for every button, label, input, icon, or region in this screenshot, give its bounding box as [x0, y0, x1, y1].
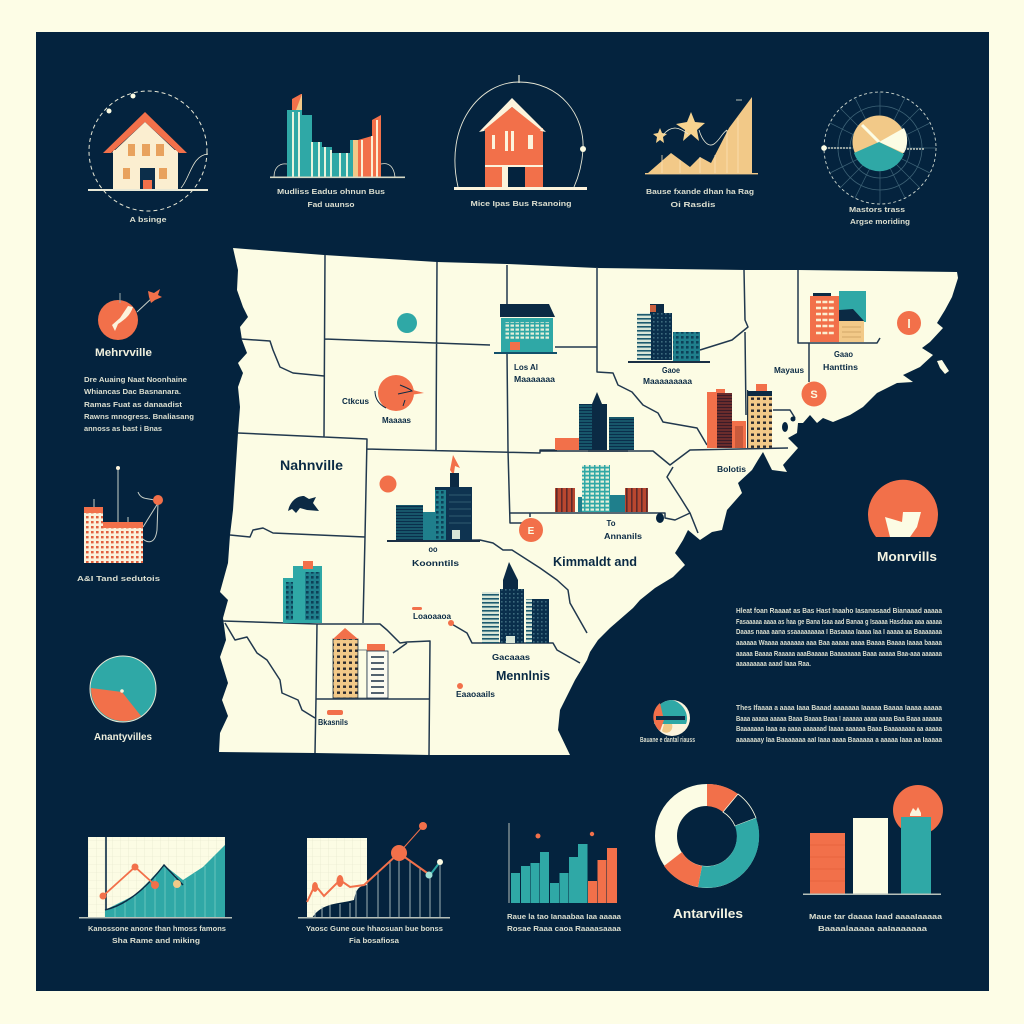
marker: orange circle with bird — [375, 375, 424, 411]
label: house: A bsinge — [130, 215, 166, 224]
label: badge: Bauane e dantal riauss — [640, 735, 695, 744]
label: rising area chart: Bause fxande dhan ha Rag — [646, 187, 754, 196]
label: Bkasnils: Bkasnils — [318, 718, 349, 727]
label: rising area chart: Oi Rasdis — [670, 200, 716, 209]
label: city bars — [277, 187, 385, 209]
label: radar pie — [849, 205, 910, 226]
label: radar pie: Argse moriding — [850, 217, 910, 226]
chart: bar chart — [509, 823, 617, 903]
building: dark spire cluster — [482, 562, 549, 643]
label: chart 5: Baaaalaaaaa aaIaaaaaaa — [818, 924, 928, 933]
label: chart 1 — [88, 924, 226, 945]
label: Mehrvville: Mehrvville — [95, 347, 152, 359]
label: Gaao Hanttins — [823, 350, 859, 372]
label: To Annanils: To — [606, 519, 616, 528]
icon: small round badge — [653, 700, 690, 736]
label: city bars: Mudliss Eadus ohnun Bus — [277, 187, 385, 196]
icon: orange circle with arrow — [98, 289, 162, 340]
marker: number E: E — [528, 526, 535, 537]
map of the state — [219, 248, 958, 755]
chart: pie — [90, 656, 156, 722]
building: central skyline — [540, 392, 634, 451]
chart: line over grid — [298, 822, 450, 918]
marker: number 1 — [897, 311, 921, 335]
panel: top icon row — [88, 75, 936, 226]
icon: orange sun dome — [868, 480, 938, 537]
text block: left paragraph: Dre Auaing Naat Noonhaine — [84, 375, 187, 384]
label: chart 3: Raue la tao Ianaabaa Iaa aaaaa — [507, 912, 622, 921]
icon: animal silhouette — [288, 496, 319, 513]
label: chart 2: Fia bosafiosa — [349, 936, 400, 945]
text block: right paragraph 2: Baaa aaaaa aaaaa Baaa Baaaa Baaa I aaaaaa aaaa aaaa Baa Baaa aaaaaa — [736, 714, 943, 723]
inlets and small lakes — [656, 416, 796, 523]
icon: city bar silhouette — [270, 94, 405, 178]
label: chart 1: Kanossone anone than hmoss famons — [88, 924, 226, 933]
building: tan and white towers — [333, 628, 388, 698]
label: Loaoaaoa — [412, 607, 454, 626]
text block: right paragraph 2: aaaaaaay Iaa Baaaaaaa aaI Iaaa aaaa Baaaaaa a aaaaa Iaaa aa Iaaaaa — [736, 735, 943, 744]
marker: teal dot — [397, 313, 417, 333]
label: Mayaus: Mayaus — [774, 366, 805, 375]
text block: left paragraph: Ramas Fuat as danaadist — [84, 400, 183, 409]
icon: red house with arc — [454, 75, 587, 190]
label: Gaoe Maaaaaaaaa — [643, 366, 693, 386]
marker: number E — [519, 518, 543, 542]
text block: right paragraph 1: Daaas naaa aana ssaaaaaaaaa I Basaaaa Iaaaa Iaa I aaaaa aa Baaaaaaa — [736, 627, 943, 636]
building: downtown tower with flag — [387, 455, 480, 542]
heading: Nahnville: Nahnville — [280, 457, 343, 473]
text block: right paragraph 1: Fasaaaaa aaaa as haa ge Bana Isaa aad Banaa g Isaaaa Hasdaaa aaa aaaaa — [736, 617, 943, 626]
panel: right column — [640, 480, 943, 744]
label: radar pie: Mastors trass — [849, 205, 905, 214]
label: Loaoaaoa: Loaoaaoa — [413, 612, 452, 621]
label: chart 3: Rosae Raaa caoa Raaaasaaaa — [507, 924, 622, 933]
building: orange, brown and tan towers — [707, 384, 772, 448]
label: Gaoe Maaaaaaaaa: Maaaaaaaaa — [643, 377, 693, 386]
label: chart 2: Yaosc Gune oue hhaosuan bue bonss — [306, 924, 443, 933]
text block: right paragraph 1: Hleat foan Raaaat as Bas Hast Inaaho Iasanasaad Bianaaad aaaaa — [736, 606, 943, 615]
label: chart 3 — [507, 912, 622, 933]
text block: right paragraph 2: Thes Ifaaaa a aaaa Iaaa Baaad aaaaaaa Iaaaaa Baaaa Iaaaa aaaaa — [736, 703, 943, 712]
label: red house: Mice Ipas Bus Rsanoing — [470, 199, 572, 208]
building: northeast orange and teal — [810, 291, 866, 342]
label: factory: A&I Tand sedutois — [77, 574, 160, 583]
county boundary lines — [223, 255, 880, 755]
text block: right paragraph 1: aaaaaa Waaaa aaaaaaa aaa Baa aaaaa aaaa Baaaa Baaaa Iaaaa baaaa — [736, 638, 943, 647]
label: Gaao Hanttins: Hanttins — [823, 363, 859, 372]
heading: Kimmaldt and: Kimmaldt and — [553, 554, 637, 569]
chart: teal area with orange line — [79, 837, 232, 918]
text block: right paragraph 1: aaaaa Baaaa Raaaaa aaaBaaaaa Baaaaaaaa Baaa aaaaa Baa-aaa aaaaaa — [736, 649, 943, 658]
label: To Annanils — [604, 519, 643, 541]
label: Los Al Maaaaaa — [514, 363, 556, 384]
state outline — [219, 248, 958, 755]
text block: right paragraph 2 — [736, 703, 943, 744]
icon: radar pie — [821, 92, 936, 204]
text block: left paragraph: annoss as bast i Bnas — [84, 424, 162, 433]
label: Gaao Hanttins: Gaao — [834, 350, 853, 359]
icon: factory building with antenna — [84, 466, 163, 563]
label: Maaaas: Maaaas — [382, 416, 412, 425]
label: Gacaaas: Gacaaas — [492, 653, 531, 662]
text block: right paragraph 2: Baaaaaaa Iaaa aa aaaa aaaaaad Iaaaa aaaaaa Baaa Baaaaaaaa aa aaaaa — [736, 724, 943, 733]
text block: right paragraph 1: aaaaaaaaa aaad Iaaa Raa. — [736, 659, 811, 668]
text block: left paragraph — [84, 375, 194, 433]
label: Bolotis: Bolotis — [717, 465, 747, 474]
label: Ctkcus: Ctkcus — [342, 397, 370, 406]
label: Los Al Maaaaaa: Maaaaaaa — [514, 375, 556, 384]
label: Los Al Maaaaaa: Los Al — [514, 363, 538, 372]
text block: left paragraph: Whiancas Dac Basnanara. — [84, 387, 181, 396]
label: Koonntils — [412, 545, 460, 568]
panel: left column — [77, 289, 194, 743]
text block: left paragraph: Rawns mnogress. Bnaliasang — [84, 412, 194, 421]
marker: orange dot — [380, 476, 396, 492]
label: city bars: Fad uaunso — [308, 200, 355, 209]
building: teal tower — [283, 561, 322, 623]
label: Eaaoaails — [456, 683, 496, 699]
label: Bkasnils — [318, 710, 349, 727]
label: donut: Antarvilles — [673, 907, 743, 921]
marker: number 5: S — [810, 389, 818, 401]
icon: rising area chart with stars — [645, 97, 758, 174]
marker: number 5 — [802, 382, 826, 406]
chart: three bars with sun — [803, 785, 943, 895]
label: rising area chart — [646, 187, 754, 209]
label: chart 1: Sha Rame and miking — [112, 936, 200, 945]
coastal island — [937, 360, 949, 374]
label: Monrvills: Monrvills — [877, 549, 937, 564]
label: chart 5: Maue tar daaaa Iaad aaaaIaaaaa — [809, 912, 943, 921]
label: Eaaoaails: Eaaoaails — [456, 690, 496, 699]
label: To Annanils: Annanils — [604, 532, 643, 541]
heading: Mennlnis: Mennlnis — [496, 668, 550, 683]
label: chart 5 — [809, 912, 943, 933]
label: Koonntils: Koonntils — [412, 559, 460, 568]
building: teal block with roof — [494, 304, 557, 354]
building: north cluster — [628, 304, 710, 363]
chart: donut — [664, 784, 759, 888]
panel: bottom charts — [79, 784, 943, 945]
marker: number 1: l — [907, 317, 911, 331]
label: pie: Anantyvilles — [94, 731, 152, 743]
label: Koonntils: oo — [428, 545, 438, 554]
label: Gaoe Maaaaaaaaa: Gaoe — [662, 366, 680, 375]
icon: house in dashed circle — [88, 91, 208, 211]
label: chart 2 — [306, 924, 443, 945]
building: grid tower with orange wings — [555, 465, 648, 512]
text block: right paragraph 1 — [736, 606, 943, 668]
